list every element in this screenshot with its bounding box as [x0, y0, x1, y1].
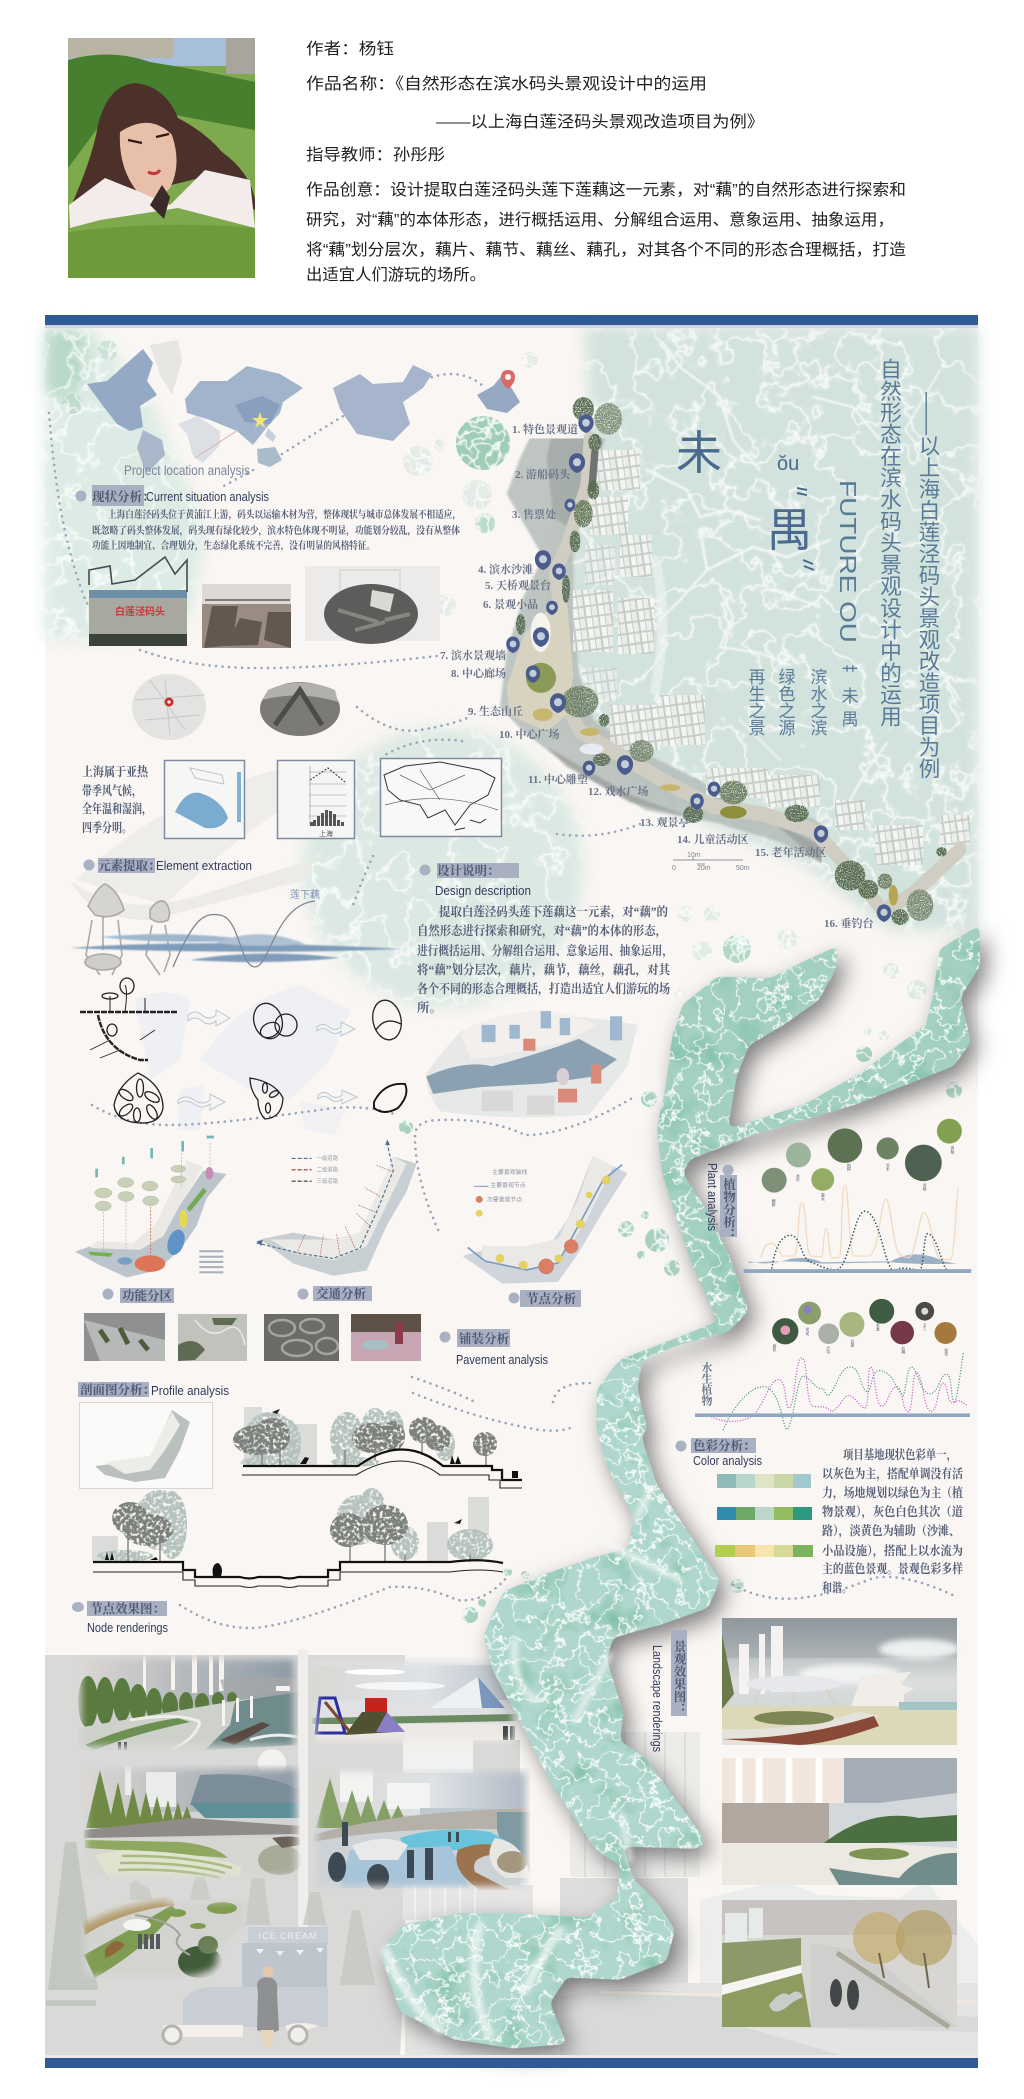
design description paragraph: 提取白莲泾码头莲下莲藕这一元素，对“藕”的: [439, 904, 668, 919]
lotus sketches: [85, 884, 170, 975]
design description paragraph: 自然形态进行探索和研究，对“藕”的本体的形态，: [417, 923, 667, 938]
grey arc shapes: [70, 765, 312, 920]
current situation paragraph: 功能上因地制宜、合理划分，生态绿化系统不完善，没有明显的风格特征。: [92, 539, 375, 552]
teal map field shapes: [45, 326, 978, 1008]
heading: function zones: 功能分区: [122, 1288, 173, 1303]
landscape render 2: [722, 1758, 957, 1885]
process arrow 1: [188, 1010, 230, 1026]
heading: profile analysis: [78, 1382, 229, 1398]
growth curves: [744, 1185, 971, 1273]
heading: color analysis: 色彩分析：: [693, 1438, 756, 1453]
numbered site labels: 9. 生态山丘: [468, 704, 523, 718]
aquatic plant names: [772, 1323, 949, 1357]
pavement photo 3: [264, 1314, 339, 1361]
traffic analysis map: 三级道路: [317, 1177, 338, 1185]
heading: node renderings: [72, 1601, 168, 1635]
color analysis paragraph: 小品设施），搭配上以水流为: [822, 1543, 963, 1558]
color analysis paragraph: [822, 1447, 963, 1595]
numbered site labels: 1. 特色景观道: [512, 422, 578, 436]
work subtitle line: ——以上海白莲泾码头景观改造项目为例》: [436, 113, 764, 131]
scattered textured circles pale: [62, 340, 927, 1041]
heading: element extraction: [84, 858, 252, 873]
slogan columns: [746, 668, 827, 737]
heading: nodes: [508, 1290, 581, 1307]
heading: nodes: 节点分析: [526, 1291, 577, 1306]
lotus root anatomy sketch: [80, 978, 178, 1060]
section elevation 1: [233, 1407, 522, 1488]
work title line: 作品名称：《自然形态在滨水码头景观设计中的运用: [306, 75, 707, 93]
current situation paragraph: 既忽略了码头整体发展，码头现有绿化较少，滨水特色体现不明显，功能划分较乱，没有从整体: [92, 524, 460, 537]
heading: color analysis: Color analysis: [693, 1453, 762, 1468]
tree names: 乔木: [885, 1163, 890, 1172]
climate text: 四季分明。: [82, 820, 132, 835]
heading: traffic: [298, 1286, 372, 1301]
heading: landscape renderings: 景观效果图：: [672, 1639, 686, 1715]
process arrow 2: [317, 1022, 355, 1036]
color swatch row 2: [717, 1507, 812, 1520]
numbered site labels: 12. 戏水广场: [588, 784, 648, 798]
heading: node renderings: Node renderings: [87, 1620, 168, 1635]
aquatic plant chart: [695, 1353, 970, 1429]
slogan columns: 绿色之源: [776, 668, 795, 737]
pavement photo 1: [84, 1313, 165, 1361]
process arrow 4: [318, 1090, 357, 1104]
numbered site labels: 14. 儿童活动区: [677, 832, 748, 846]
blue top band: [45, 315, 978, 328]
site photo: boats: [202, 584, 291, 648]
blue ink waves: [70, 934, 403, 962]
climate text: [81, 764, 152, 835]
color analysis paragraph: 以灰色为主，搭配单调没有活: [822, 1466, 963, 1481]
landscape render 3: [722, 1900, 957, 2027]
Shanghai locator map: [132, 674, 206, 740]
Asia outline map: [380, 758, 502, 836]
title character ou: [767, 488, 814, 570]
abstract final oval: [369, 998, 405, 1042]
aquatic axis label: 水生植物: [700, 1361, 712, 1407]
pavement photo 4: [351, 1314, 421, 1361]
landscape render 1: [722, 1618, 959, 1745]
pale triangular trees: [46, 1842, 375, 2006]
heading: profile analysis: 剖面图分析：: [80, 1382, 155, 1397]
aquatic plant names: 水葱: [874, 1323, 880, 1331]
node rendering: promenade: [77, 1655, 298, 1750]
scale bar: 10m: [687, 852, 701, 859]
slogan columns: 滨水之滨: [808, 668, 827, 736]
heading: pavement analysis: [440, 1329, 548, 1367]
project location caption: Project location analysis: [124, 462, 250, 478]
heading: design description: [420, 863, 531, 898]
vertical title 1: 自然形态在滨水码头景观设计中的运用: [878, 358, 902, 727]
heading: current situation: [76, 485, 269, 506]
heading: color analysis: [676, 1438, 762, 1468]
node rendering: water plaza: [313, 1768, 530, 1890]
climate bar chart: [278, 760, 354, 838]
node analysis map: 主要景观节点: [490, 1181, 526, 1189]
process arrow 3: [178, 1094, 225, 1110]
numbered site labels: [440, 422, 874, 930]
section elevation 2: [92, 1488, 503, 1588]
color swatch row 3: [715, 1545, 813, 1557]
tree names: 灌木: [820, 1193, 825, 1201]
tree names: [771, 1146, 955, 1207]
location pins: [506, 414, 891, 922]
heading: current situation: Current situation analysis: [146, 489, 269, 504]
concept paragraph: [306, 180, 906, 284]
color analysis paragraph: 主的蓝色景观。景观色彩多样: [822, 1561, 963, 1576]
final bold oval: [374, 1084, 406, 1112]
function zoning map: [75, 1137, 227, 1277]
background buildings right: [403, 1732, 700, 1983]
climate text: 上海属于亚热: [82, 764, 149, 779]
tree clusters: [516, 397, 947, 925]
poster background: [45, 325, 978, 2058]
site photo: pier sign: 白莲泾码头: [115, 605, 165, 618]
curve label: 莲下藕: [290, 889, 320, 901]
heading: profile analysis: Profile analysis: [151, 1383, 229, 1398]
slogan columns: 再生之景: [746, 668, 765, 736]
plant chart: trees: [744, 1119, 971, 1273]
traffic analysis map: 二级道路: [317, 1165, 338, 1174]
site photo: workers: [305, 566, 440, 644]
heading: pavement analysis: Pavement analysis: [456, 1352, 548, 1367]
numbered site labels: 11. 中心雕塑: [528, 772, 588, 786]
heading: element extraction: 元素提取：: [98, 858, 161, 873]
numbered site labels: 4. 滨水沙滩: [478, 562, 533, 576]
grey backdrop lower left: [45, 1650, 978, 2055]
cut lotus shape: [250, 1078, 283, 1119]
heading: landscape renderings: Landscape renderings: [650, 1645, 665, 1752]
pavement photos: [84, 1313, 421, 1361]
author header: [68, 38, 906, 284]
China map: [333, 365, 432, 441]
climate text: 全年温和湿润，: [82, 801, 152, 816]
scale bar: 50m: [736, 865, 750, 872]
tree names: 黄杨: [949, 1146, 955, 1154]
site photo: pier sign: [89, 557, 187, 646]
tree circles: [762, 1119, 962, 1193]
aquatic plant names: 玉兰: [922, 1323, 927, 1331]
field crack lines: [647, 343, 960, 800]
current situation paragraph: [92, 508, 461, 552]
scattered textured circles green: [399, 416, 962, 1623]
design description paragraph: 所。: [417, 1000, 442, 1015]
isometric city model: [426, 1009, 638, 1117]
pale world map backdrop: [135, 985, 350, 1135]
color analysis paragraph: 项目基地现状色彩单一，: [843, 1447, 957, 1462]
numbered site labels: 7. 滨水景观墙: [440, 648, 506, 662]
poster title: [676, 358, 940, 779]
rhizome curve: [173, 901, 315, 967]
node rendering: playground: [312, 1657, 517, 1745]
scale bar: 0: [672, 865, 676, 872]
tree names: 香樟: [922, 1183, 927, 1192]
vertical title 2: ——以上海白莲泾码头景观改造项目为例: [916, 392, 940, 779]
aquatic plant names: 菖蒲: [850, 1339, 855, 1348]
numbered site labels: 10. 中心广场: [499, 727, 560, 741]
aquatic plant names: 红枫: [901, 1346, 906, 1355]
current situation paragraph: 上海白莲泾码头位于黄浦江上游，码头以运输木材为营，整体现状与城市总体发展不相适应，: [108, 508, 461, 521]
heading: design description: 设计说明：: [437, 863, 500, 878]
supervisor line: 指导教师：孙彤彤: [306, 146, 445, 164]
title character wei: 未: [676, 427, 722, 479]
heading: landscape renderings: [650, 1630, 687, 1752]
concept paragraph: 研究，对“藕”的本体形态，进行概括运用、分解组合运用、意象运用、抽象运用，: [306, 210, 894, 229]
numbered site labels: 6. 景观小品: [483, 597, 538, 611]
color analysis paragraph: 和谐。: [822, 1580, 852, 1595]
color analysis paragraph: 力，场地规划以绿色为主（植: [822, 1485, 963, 1500]
design description paragraph: [417, 904, 673, 1015]
rainfall map chart: [164, 760, 244, 838]
numbered site labels: 15. 老年活动区: [755, 845, 826, 859]
background mountains: [700, 1880, 978, 1985]
heading: plant analysis: [705, 1163, 737, 1240]
heading: plant analysis: 植物分析：: [722, 1177, 736, 1240]
heading: element extraction: Element extraction: [156, 858, 252, 873]
FUTURE OU vertical: FUTURE OU: [835, 480, 861, 643]
old site photo: [260, 682, 340, 736]
tree names: 柏树: [846, 1163, 851, 1172]
tree names: 柳树: [771, 1198, 776, 1207]
ribbon river shape: [380, 925, 980, 2048]
scale bar: 20m: [697, 865, 711, 872]
traffic analysis map: [257, 1139, 417, 1276]
author line: 作者：杨钰: [306, 40, 394, 58]
author photo: [68, 38, 255, 278]
pavement photo 2: [178, 1314, 247, 1361]
abstract oval group: [249, 1000, 297, 1042]
traffic analysis map: 一级道路: [317, 1154, 338, 1162]
numbered site labels: 2. 游船码头: [515, 467, 571, 481]
heading: traffic: 交通分析: [316, 1286, 367, 1301]
design description paragraph: 进行概括运用、分解组合运用、意象运用、抽象运用，: [417, 943, 673, 958]
aquatic plant circles: [772, 1299, 957, 1357]
concept paragraph: 出适宜人们游玩的场所。: [306, 266, 486, 284]
design description paragraph: 将“藕”划分层次，藕片，藕节，藕丝，藕孔，对其: [417, 962, 672, 977]
color swatch row 1: [717, 1474, 811, 1488]
numbered site labels: 13. 观景亭: [640, 815, 690, 829]
heading: function zones: [102, 1288, 174, 1303]
aquatic plant names: 荷花: [772, 1343, 777, 1352]
city blocks: [573, 450, 970, 865]
node rendering: amphitheatre: [82, 1765, 302, 1880]
aquatic plant names: 鸢尾: [805, 1327, 810, 1336]
heading: plant analysis: Plant analysis: [705, 1163, 720, 1231]
dotted connector lines: [49, 374, 957, 1628]
climate bar chart: 上海: [319, 829, 333, 838]
ice cream truck: [163, 1927, 328, 2048]
heading: pavement analysis: 铺装分析: [459, 1331, 510, 1346]
color analysis paragraph: 路），淡黄色为辅助（沙滩、: [822, 1523, 960, 1538]
numbered site labels: 8. 中心廊场: [451, 666, 506, 680]
heading: design description: Design description: [435, 883, 531, 898]
blue bottom band: [45, 2055, 978, 2068]
aquatic plant names: 芦苇: [826, 1346, 831, 1355]
numbered site labels: 3. 售票处: [512, 507, 557, 521]
concept paragraph: 将“藕”划分层次，藕片、藕节、藕丝、藕孔，对其各个不同的形态合理概括，打造: [306, 241, 906, 259]
site master plan: [440, 344, 976, 933]
background road: [405, 1983, 978, 2055]
node rendering: lawn path: [80, 1896, 250, 1980]
location maps: [87, 340, 520, 470]
ice cream truck: ICE CREAM: [258, 1931, 318, 1941]
lotus slice drawing: [114, 1073, 163, 1123]
node analysis map: [463, 1156, 627, 1284]
foam streaks on ribbon: [385, 1060, 680, 2035]
heading: current situation: 现状分析：: [92, 489, 155, 504]
climate text: 带季风气候，: [81, 783, 142, 798]
world map: [87, 340, 303, 470]
title character ou: 禺: [767, 504, 812, 556]
design description paragraph: 各个不同的形态合理概括，打造出适宜人们游玩的场: [417, 981, 670, 996]
heading: node renderings: 节点效果图：: [90, 1601, 165, 1616]
numbered site labels: 5. 天桥观景台: [485, 578, 552, 592]
grey wash: [500, 344, 976, 933]
scale bar: [672, 852, 750, 872]
numbered site labels: 16. 垂钓台: [824, 916, 874, 930]
pinyin: ŏu: [777, 453, 799, 475]
node analysis map: 次要景观节点: [487, 1196, 522, 1204]
Shanghai map with red pin: [477, 370, 520, 413]
aquatic plant names: 银杏: [944, 1348, 949, 1357]
color analysis paragraph: 物景观），灰色白色其次（道: [822, 1504, 963, 1519]
node analysis map: 主要景观轴线: [492, 1168, 528, 1176]
tree names: 水杉: [795, 1173, 800, 1182]
concept paragraph: 作品创意：设计提取白莲泾码头莲下莲藕这一元素，对“藕”的自然形态进行探索和: [306, 180, 906, 199]
small vertical title: 艹未禺: [838, 664, 858, 733]
park promenade: [507, 439, 960, 911]
section key plan: [80, 1402, 212, 1488]
